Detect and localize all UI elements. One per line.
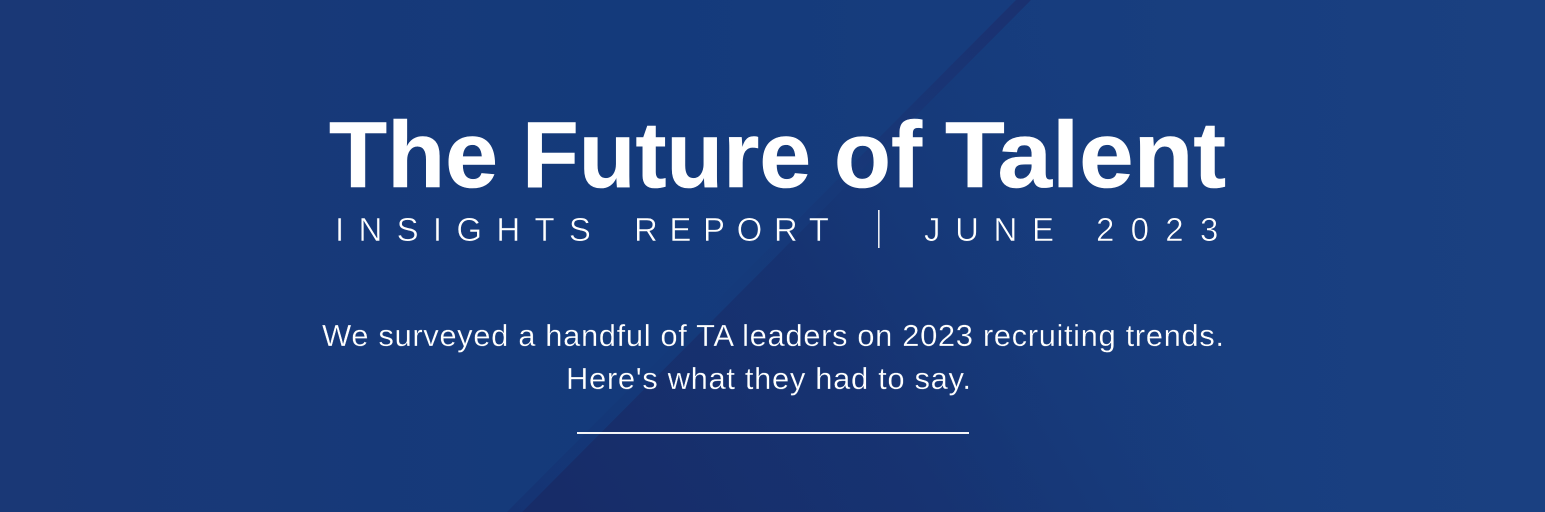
title bbox=[329, 102, 1226, 207]
subtitle: JUNE bbox=[924, 211, 1069, 248]
subtitle: INSIGHTS bbox=[335, 211, 605, 248]
title: Talent bbox=[945, 102, 1226, 207]
divider line bbox=[577, 432, 969, 434]
subtitle: 2023 bbox=[1096, 211, 1235, 248]
subtitle: REPORT bbox=[634, 211, 841, 248]
subtitle divider bbox=[878, 210, 880, 248]
intro text bbox=[322, 318, 1224, 396]
subtitle bbox=[335, 210, 1235, 248]
title: Future bbox=[522, 102, 811, 207]
intro text: We surveyed a handful of TA leaders on 2023 recruiting trends. bbox=[322, 318, 1224, 353]
diagonal shaded area bbox=[522, 0, 1545, 512]
title: of bbox=[834, 102, 923, 207]
title: The bbox=[329, 102, 498, 207]
intro text: Here's what they had to say. bbox=[566, 361, 971, 396]
diagonal stripe bbox=[507, 0, 1031, 512]
